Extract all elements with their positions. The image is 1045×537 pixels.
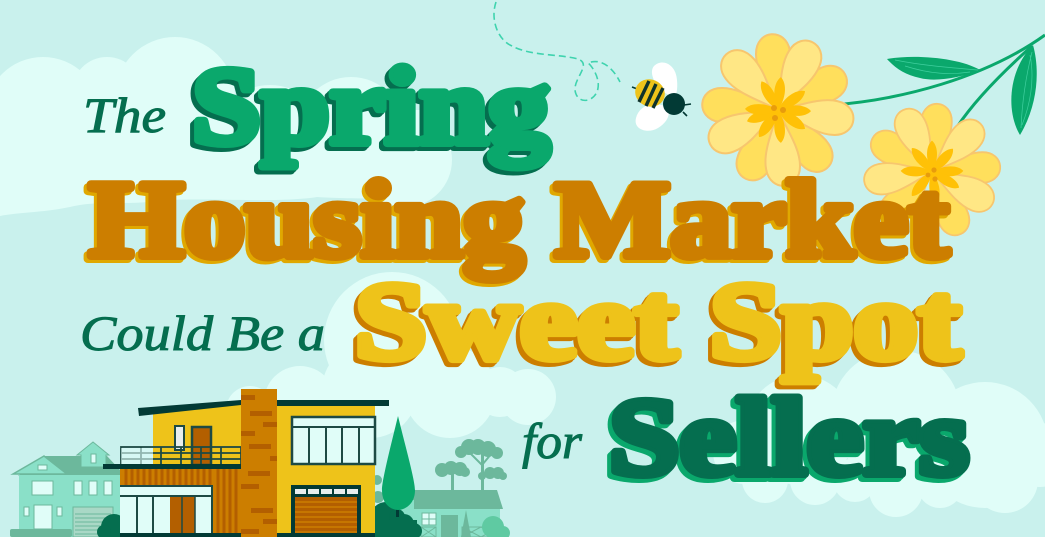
stems — [832, 35, 1045, 105]
head — [663, 93, 685, 115]
chimney — [241, 389, 277, 537]
body — [631, 75, 669, 111]
house: teal right with trees — [372, 439, 510, 537]
title: Sweet Spot: Sweet Spot — [351, 264, 957, 386]
title: Sellers: Sellers — [607, 378, 967, 500]
house: teal left — [10, 442, 120, 537]
flower: small — [862, 103, 1001, 241]
bushes — [97, 502, 422, 537]
balcony floor — [103, 464, 241, 469]
title: Spring: Spring — [192, 45, 550, 167]
title: Housing Market: Housing Market — [86, 162, 946, 283]
ground — [120, 533, 375, 537]
roof — [138, 400, 241, 416]
title: Sweet Spot: Sweet Spot — [355, 260, 961, 382]
balcony rail — [121, 447, 241, 465]
branch with leaves — [832, 35, 1045, 135]
tree: cypress — [382, 416, 415, 517]
title: Could Be a: Could Be a — [80, 305, 325, 361]
title: Spring: Spring — [190, 47, 548, 169]
garage — [291, 485, 361, 537]
title: The: The — [83, 87, 166, 143]
cloud: centre behind Sweet — [226, 272, 556, 438]
upper right window — [292, 417, 375, 464]
upper door and window — [192, 427, 211, 465]
leaf: right — [1011, 45, 1037, 135]
title: Spring: Spring — [188, 49, 546, 171]
cloud: lower right — [713, 350, 1045, 517]
title: Sellers: Sellers — [609, 376, 969, 498]
cloud: upper left — [0, 37, 452, 216]
icon: bee — [631, 62, 691, 131]
yellow walls — [153, 403, 241, 537]
flower: large — [701, 33, 856, 187]
title: Sweet Spot: Sweet Spot — [353, 262, 959, 384]
lower windows — [120, 486, 212, 534]
antennae and sting — [632, 87, 691, 116]
title: for: for — [522, 413, 583, 469]
bee flight trail — [494, 2, 620, 100]
leaf: left — [887, 57, 980, 80]
title: Sellers: Sellers — [605, 380, 965, 502]
wings — [652, 62, 677, 98]
wood siding — [120, 469, 241, 537]
house: main modern — [103, 389, 389, 537]
title: Housing Market: Housing Market — [89, 159, 949, 280]
